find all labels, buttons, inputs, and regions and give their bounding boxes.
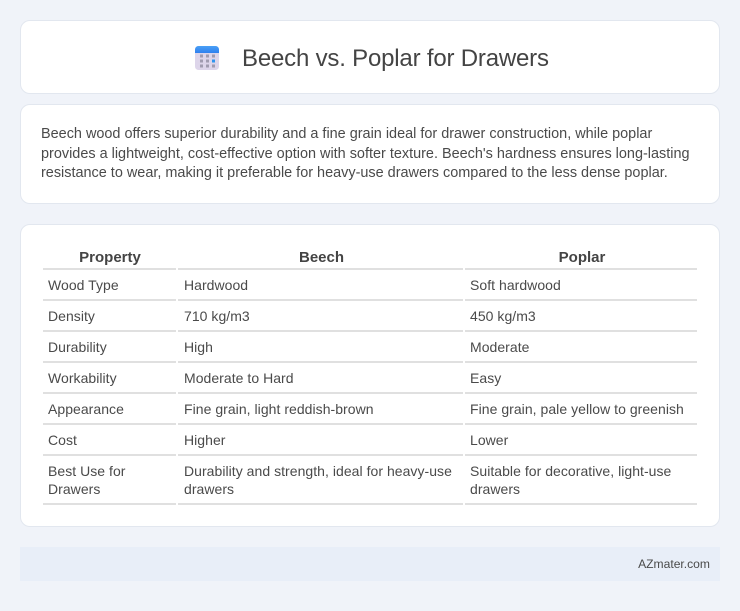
table header: Poplar	[559, 249, 605, 266]
row: appearance: Fine grain, light reddish-brown	[184, 401, 374, 417]
row: wood type	[48, 277, 561, 293]
row: durability: High	[184, 339, 213, 355]
row: best use for drawers: drawers	[470, 481, 520, 497]
title: Beech vs. Poplar for Drawers	[242, 45, 549, 72]
summary text: resistance to wear, making it preferable for heavy-use drawers compared to the less dense poplar.	[41, 165, 668, 181]
row: durability: Moderate	[470, 339, 529, 355]
row: cost: Cost	[48, 432, 77, 448]
table header: Beech	[299, 249, 344, 266]
icon: calendar	[195, 46, 219, 70]
row: best use for drawers: Best Use for	[48, 463, 126, 479]
row: best use for drawers: Drawers	[48, 481, 100, 497]
table header: Property	[79, 249, 141, 266]
row: cost: Higher	[184, 432, 225, 448]
row: appearance: Appearance	[48, 401, 124, 417]
row: durability: Durability	[48, 339, 107, 355]
row: wood type: Wood Type	[48, 277, 119, 293]
summary text	[41, 126, 690, 181]
footer credit: AZmater.com	[638, 557, 710, 571]
row: workability	[48, 370, 502, 386]
row: density: 710 kg/m3	[184, 308, 250, 324]
table header	[79, 249, 606, 266]
footer	[20, 547, 720, 581]
row: wood type: Hardwood	[184, 277, 248, 293]
row: cost	[48, 432, 508, 448]
row: workability: Moderate to Hard	[184, 370, 294, 386]
panel: header	[20, 20, 720, 94]
row: best use for drawers: Durability and strength, ideal for heavy-use	[184, 463, 452, 479]
summary text: Beech wood offers superior durability and a fine grain ideal for drawer construction, while poplar	[41, 126, 652, 142]
panel: summary	[20, 104, 720, 204]
row: durability	[48, 339, 529, 355]
row: cost: Lower	[470, 432, 508, 448]
row: appearance	[48, 401, 684, 417]
row: density: Density	[48, 308, 95, 324]
row: density: 450 kg/m3	[470, 308, 536, 324]
row: density	[48, 308, 536, 324]
row: best use for drawers	[48, 463, 671, 497]
summary text: provides a lightweight, cost-effective option with softer texture. Beech's hardness ensures long-lasting	[41, 146, 690, 162]
row: best use for drawers: drawers	[184, 481, 234, 497]
row: best use for drawers: Suitable for decorative, light-use	[470, 463, 671, 479]
row: appearance: Fine grain, pale yellow to greenish	[470, 401, 684, 417]
row: wood type: Soft hardwood	[470, 277, 561, 293]
panel: comparison table	[20, 224, 720, 527]
row: workability: Workability	[48, 370, 117, 386]
row: workability: Easy	[470, 370, 501, 386]
